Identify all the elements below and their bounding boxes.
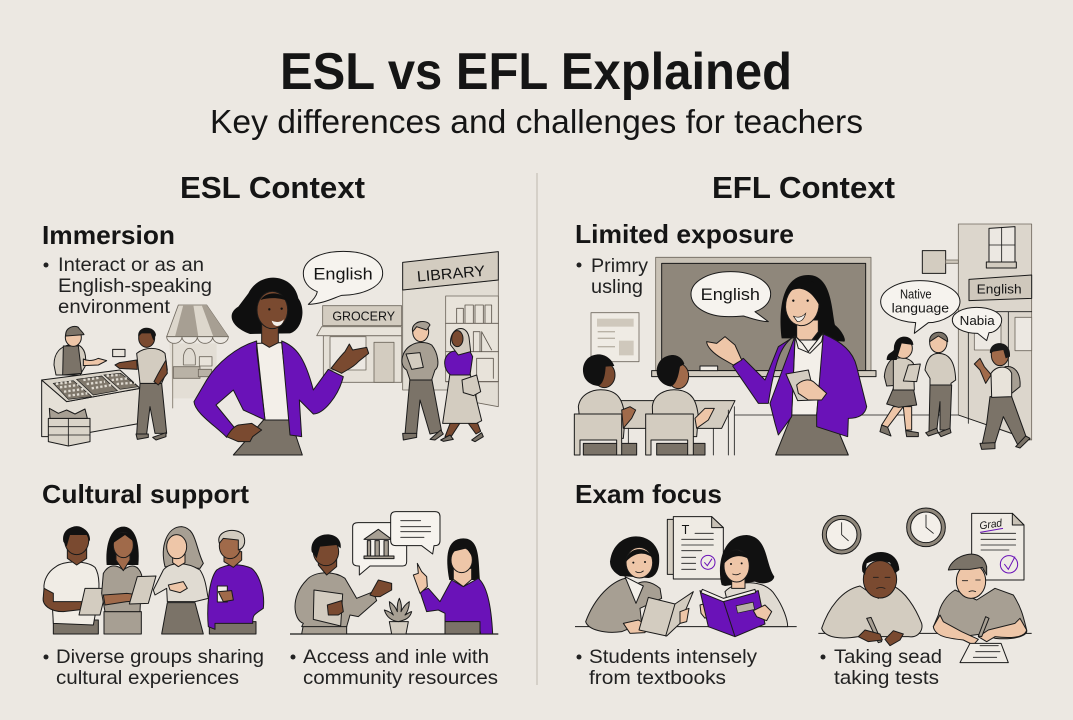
text block: taking tests bullet: taking tests <box>834 667 939 689</box>
panel: limited exposure <box>574 219 1032 455</box>
speech bubble: native language <box>881 281 960 333</box>
person three <box>153 527 208 634</box>
woman in hijab <box>441 328 483 442</box>
clock right <box>907 508 945 547</box>
person two <box>102 527 156 634</box>
heading: cultural support: Cultural support <box>42 479 249 509</box>
speech bubble: native language: language <box>892 301 949 316</box>
speech bubble: English <box>691 272 771 322</box>
text block: limited exposure bullet: usling <box>591 276 643 298</box>
graded paper: Grad <box>979 517 1004 532</box>
floor line <box>735 415 1030 440</box>
heading: ESL Context: ESL Context <box>180 170 365 205</box>
market stall background <box>167 305 228 408</box>
table line right <box>818 632 1032 635</box>
speech bubble: Nabia: Nabia <box>960 313 995 328</box>
graded paper <box>972 513 1024 580</box>
title: ESL vs EFL Explained <box>280 43 792 101</box>
student reading left <box>586 536 662 633</box>
speech bubble: text lines <box>391 512 440 554</box>
schoolboy right <box>974 343 1030 449</box>
student one <box>574 354 637 455</box>
student two <box>646 355 714 455</box>
man with folder <box>295 534 392 634</box>
blackboard <box>652 257 876 377</box>
beige book <box>639 592 693 636</box>
text block: taking tests bullet: Taking sead <box>834 646 942 668</box>
speech bubble: English: English <box>701 285 760 304</box>
illustration: classroom and corridor <box>574 224 1032 455</box>
text block: immersion bullet: English-speaking <box>58 275 212 297</box>
panel: immersion <box>42 220 498 455</box>
produce counter <box>42 370 140 437</box>
panel: exam focus <box>575 479 1032 689</box>
speech bubble: English: English <box>313 264 373 283</box>
vendor <box>54 326 107 375</box>
heading: exam focus: Exam focus <box>575 479 722 509</box>
text block: textbooks bullet <box>576 646 757 689</box>
library building: LIBRARY <box>416 263 486 286</box>
writing student light <box>933 554 1027 645</box>
woman pointing <box>413 538 493 634</box>
heading: limited exposure: Limited exposure <box>575 219 794 249</box>
speech bubble: museum <box>353 523 407 575</box>
text block: textbooks bullet: Students intensely <box>589 646 757 668</box>
library building <box>403 252 498 407</box>
table line left <box>575 625 797 628</box>
student reading right <box>700 535 788 627</box>
text block: limited exposure bullet: Primry <box>591 255 648 277</box>
clock left <box>822 515 861 554</box>
subtitle: Key differences and challenges for teachers <box>210 103 863 140</box>
text block: community resources bullet <box>290 646 498 689</box>
grocery shop: GROCERY <box>332 310 396 324</box>
text block: diverse groups bullet: cultural experiences <box>56 667 239 689</box>
speech bubble: native language: Native <box>900 286 932 301</box>
teacher <box>707 275 867 455</box>
schoolgirl <box>880 337 920 437</box>
building <box>958 224 1032 440</box>
schoolboy centre <box>925 332 956 437</box>
text block: immersion bullet <box>44 254 212 318</box>
illustration: diverse group and community talk <box>43 512 498 634</box>
speech bubble: Nabia <box>952 307 1002 341</box>
text block: community resources bullet: Access and inle with <box>303 646 489 668</box>
purple book <box>700 589 772 637</box>
text block: diverse groups bullet: Diverse groups sharing <box>56 646 264 668</box>
test paper with check <box>667 517 723 579</box>
writing student dark <box>822 552 922 646</box>
crate <box>48 408 90 446</box>
person four <box>208 530 264 634</box>
illustration: studying and testing students <box>575 508 1032 663</box>
text block: textbooks bullet: from textbooks <box>589 667 726 689</box>
grocery shop <box>317 306 402 382</box>
man with tablet <box>402 322 443 440</box>
text block: community resources bullet: community resources <box>303 667 498 689</box>
desk <box>615 401 735 455</box>
test paper with check: T <box>682 523 690 537</box>
text block: immersion bullet: Interact or as an <box>58 254 204 276</box>
heading: EFL Context: EFL Context <box>712 170 895 205</box>
building: English <box>977 281 1022 296</box>
hanging square sign <box>922 251 958 273</box>
text block: diverse groups bullet <box>44 646 264 689</box>
exam sheet on desk <box>960 643 1008 663</box>
poster <box>591 313 639 362</box>
illustration: immersion street scene <box>42 251 498 455</box>
potted plant <box>384 598 412 634</box>
speech bubble: English <box>303 251 383 304</box>
text block: taking tests bullet <box>820 646 942 689</box>
panel: cultural support <box>42 479 498 689</box>
customer <box>113 328 167 440</box>
ground line <box>290 632 498 636</box>
main woman <box>194 278 369 455</box>
text block: immersion bullet: environment <box>58 296 171 318</box>
person one <box>43 527 107 634</box>
heading: immersion: Immersion <box>42 220 175 250</box>
text block: limited exposure bullet <box>576 255 648 298</box>
